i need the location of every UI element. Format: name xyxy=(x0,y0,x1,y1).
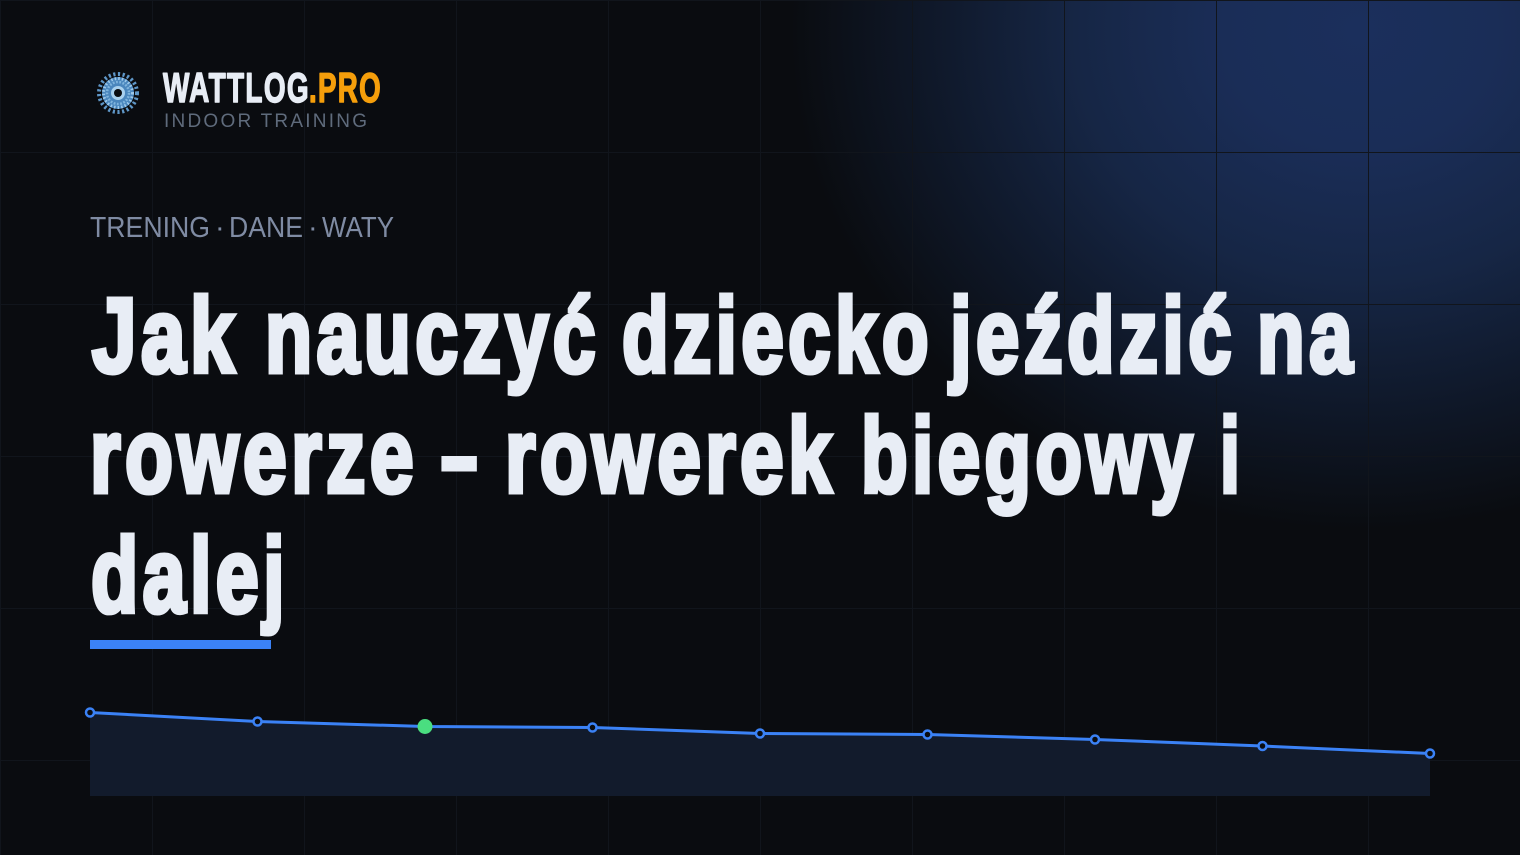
line chart xyxy=(86,708,1434,796)
title: nauczyć xyxy=(265,277,600,395)
chart area xyxy=(90,712,1430,796)
eyebrow: DANE xyxy=(229,212,303,244)
title: biegowy xyxy=(861,397,1197,515)
eyebrow xyxy=(90,212,394,244)
title: dalej xyxy=(91,517,289,635)
title: Jak xyxy=(92,277,239,395)
title: jeździć xyxy=(949,277,1236,395)
data points xyxy=(86,708,1434,758)
title: na xyxy=(1257,277,1357,395)
title: rowerek xyxy=(505,397,836,515)
title: i xyxy=(1220,397,1244,515)
title xyxy=(90,277,1357,635)
title: rowerze xyxy=(90,397,418,515)
title: dziecko xyxy=(622,277,933,395)
eyebrow: WATY xyxy=(322,212,394,244)
highlighted point xyxy=(418,719,432,734)
brand name: .PRO xyxy=(309,64,382,111)
logo xyxy=(99,64,382,132)
eyebrow: · xyxy=(308,212,318,244)
icon: cassette gear xyxy=(99,74,137,112)
title: – xyxy=(441,397,481,515)
title underline xyxy=(90,640,271,649)
tagline: INDOOR TRAINING xyxy=(164,111,367,132)
eyebrow: · xyxy=(215,212,225,244)
brand name: WATTLOG xyxy=(163,64,310,111)
eyebrow: TRENING xyxy=(90,212,210,244)
chart line xyxy=(90,712,1430,754)
